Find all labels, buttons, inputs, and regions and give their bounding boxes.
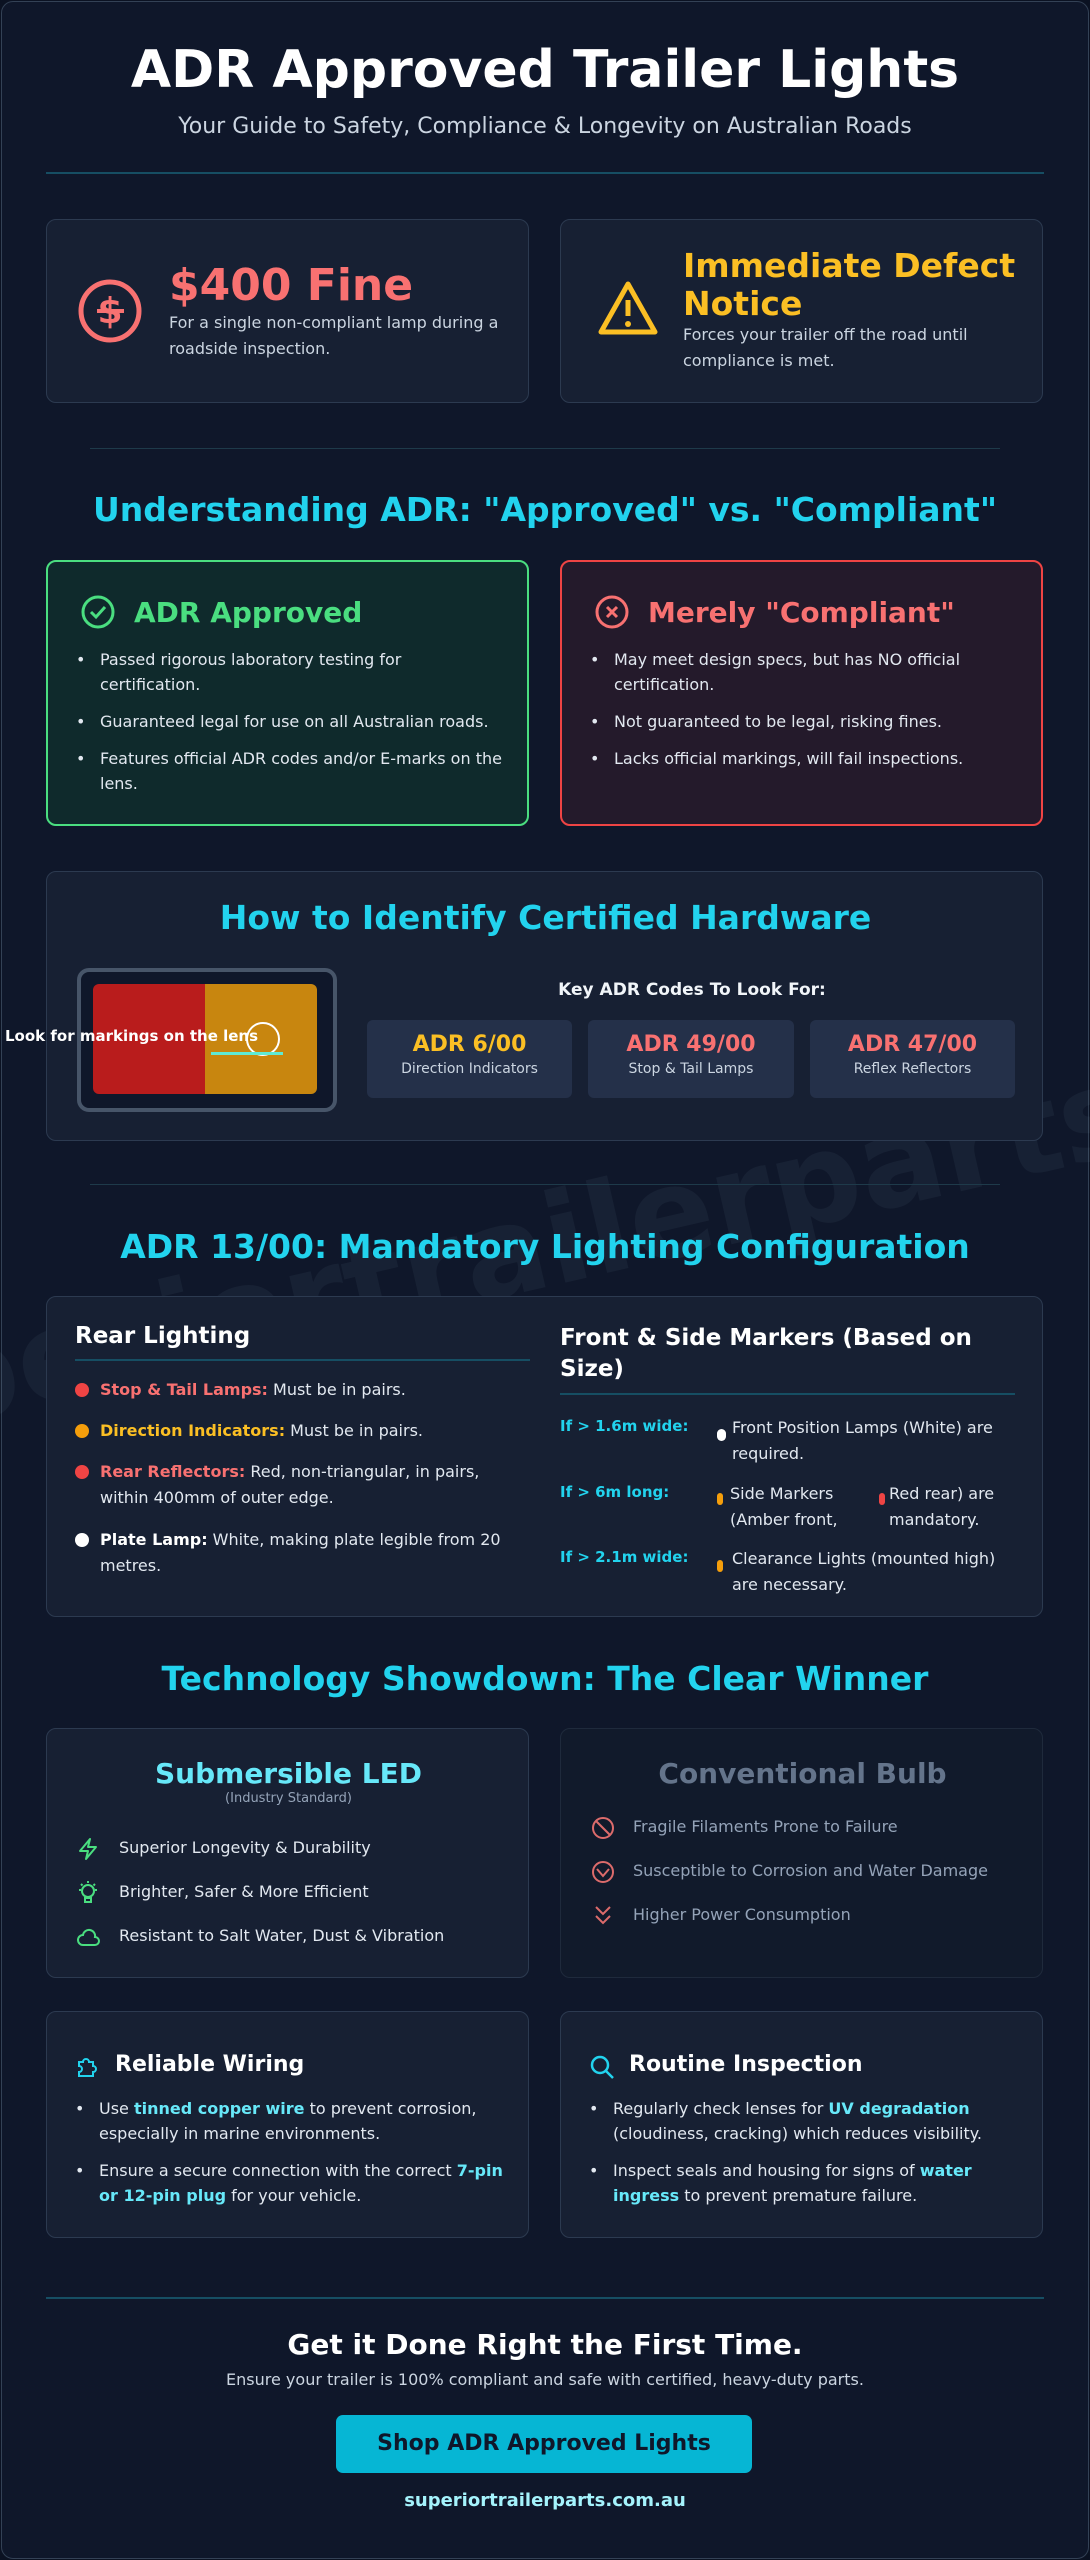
stat text: For a single non-compliant lamp during a roadside inspection.	[169, 313, 498, 358]
code: 6/00: Direction Indicators	[401, 1061, 538, 1077]
panel: LED: Submersible LED	[155, 1757, 422, 1790]
LED list: Resistant to Salt Water, Dust & Vibration	[119, 1926, 444, 1945]
icon: dollar circle	[78, 280, 142, 342]
panel: wiring: Reliable Wiring	[115, 2052, 304, 2077]
panel: bulb: Higher Power Consumption	[633, 1905, 851, 1924]
CTA heading: Get it Done Right the First Time.	[287, 2328, 803, 2361]
rear lighting column	[75, 1323, 530, 1575]
heading: technology: Technology Showdown: The Clear Winner	[162, 1659, 928, 1698]
icon: x	[596, 596, 628, 628]
panel: bulb: Fragile Filaments Prone to Failure	[633, 1817, 898, 1836]
panel: bulb	[560, 1728, 1043, 1978]
panel heading: ADR Approved	[134, 596, 362, 629]
panel: wiring: Ensure a secure connection with the correct 7-pin or 12-pin plug for your vehicle.	[99, 2161, 503, 2205]
stat card: defect	[560, 219, 1043, 403]
list: Lacks official markings, will fail inspections.	[614, 749, 963, 768]
panel: configuration: Stop & Tail Lamps: Must be in pairs.	[100, 1380, 406, 1399]
code: 47/00: Reflex Reflectors	[854, 1061, 971, 1077]
panel: configuration: Front Position Lamps (White) are required.	[732, 1418, 993, 1463]
icon: check	[82, 596, 114, 628]
title: ADR Approved Trailer Lights	[131, 40, 959, 100]
list	[592, 650, 963, 768]
codes label: Key ADR Codes To Look For:	[558, 980, 826, 1000]
panel: LED: (Industry Standard)	[225, 1791, 352, 1806]
panel: inspection: Routine Inspection	[629, 2052, 863, 2077]
lens illustration	[77, 968, 337, 1112]
list: May meet design specs, but has NO official certification.	[614, 650, 960, 694]
panel: inspection: Inspect seals and housing for signs of water ingress to prevent premature failure.	[613, 2161, 972, 2205]
code: 49/00: Stop & Tail Lamps	[629, 1061, 753, 1077]
panel: configuration: If > 6m long:	[560, 1483, 669, 1501]
panel: configuration: Plate Lamp: White, making plate legible from 20 metres.	[100, 1530, 501, 1575]
rear lighting column: Rear Lighting	[75, 1323, 250, 1349]
CTA button: Shop ADR Approved Lights	[377, 2431, 711, 2456]
list: Features official ADR codes and/or E-marks on the lens.	[100, 749, 502, 793]
icon: warning	[598, 282, 658, 334]
panel: LED	[46, 1728, 529, 1978]
LED list: Brighter, Safer & More Efficient	[119, 1882, 369, 1901]
code: 49/00	[588, 1020, 794, 1098]
panel: approved	[46, 560, 529, 826]
stat text: Forces your trailer off the road until compliance is met.	[683, 325, 968, 370]
code: 47/00	[810, 1020, 1015, 1098]
panel: wiring	[46, 2011, 529, 2238]
list: Not guaranteed to be legal, risking fines.	[614, 712, 942, 731]
code: 6/00	[367, 1020, 572, 1098]
subtitle: Your Guide to Safety, Compliance & Longevity on Australian Roads	[178, 114, 912, 139]
CTA text: Ensure your trailer is 100% compliant and safe with certified, heavy-duty parts.	[226, 2370, 864, 2389]
code: 49/00: ADR 49/00	[626, 1032, 756, 1057]
panel: compliant	[560, 560, 1043, 826]
front & side column: Front & Side Markers (Based on Size)	[560, 1325, 972, 1382]
list	[78, 650, 502, 793]
panel heading: Merely "Compliant"	[648, 596, 955, 629]
LED list: Superior Longevity & Durability	[119, 1838, 371, 1857]
panel: inspection: Regularly check lenses for UV degradation (cloudiness, cracking) which reduces visibility.	[613, 2099, 982, 2143]
code: 6/00: ADR 6/00	[413, 1032, 526, 1057]
panel: bulb: Susceptible to Corrosion and Water Damage	[633, 1861, 988, 1880]
panel: configuration: If > 1.6m wide:	[560, 1417, 688, 1435]
panel: configuration: Direction Indicators: Must be in pairs.	[100, 1421, 423, 1440]
panel: configuration: Clearance Lights (mounted high) are necessary.	[732, 1549, 995, 1594]
stat heading: $400 Fine	[169, 260, 413, 311]
website: superiortrailerparts.com.au	[404, 2490, 686, 2511]
lens label: Look for markings on the lens	[5, 1027, 258, 1045]
CTA button	[336, 2415, 752, 2473]
list: Passed rigorous laboratory testing for certification.	[100, 650, 401, 694]
panel: configuration: If > 2.1m wide:	[560, 1548, 688, 1566]
panel: configuration	[46, 1296, 1043, 1617]
panel: hardware	[46, 871, 1043, 1141]
icon: puzzle	[78, 2058, 97, 2077]
icon: search	[590, 2056, 614, 2079]
heading: understanding: Understanding ADR: "Approved" vs. "Compliant"	[93, 490, 997, 529]
heading: mandatory config: ADR 13/00: Mandatory Lighting Configuration	[120, 1227, 970, 1266]
panel: inspection	[560, 2011, 1043, 2238]
panel: configuration: Side Markers (Amber front,	[730, 1484, 838, 1529]
panel: wiring: Use tinned copper wire to prevent corrosion, especially in marine environments.	[99, 2099, 476, 2143]
panel: configuration: Red rear) are mandatory.	[889, 1484, 994, 1529]
icon: dollar circle: $	[97, 291, 123, 332]
heading: How to Identify Certified Hardware	[220, 898, 871, 937]
list: Guaranteed legal for use on all Australian roads.	[100, 712, 489, 731]
front & side column	[560, 1325, 1015, 1594]
code: 47/00: ADR 47/00	[848, 1032, 977, 1057]
panel: bulb: Conventional Bulb	[658, 1757, 947, 1790]
panel: configuration: Rear Reflectors: Red, non-triangular, in pairs, within 400mm of outer edge.	[100, 1462, 479, 1507]
stat card: fine	[46, 219, 529, 403]
stat heading: Immediate Defect Notice	[683, 246, 1015, 323]
LED list	[77, 1838, 444, 1946]
